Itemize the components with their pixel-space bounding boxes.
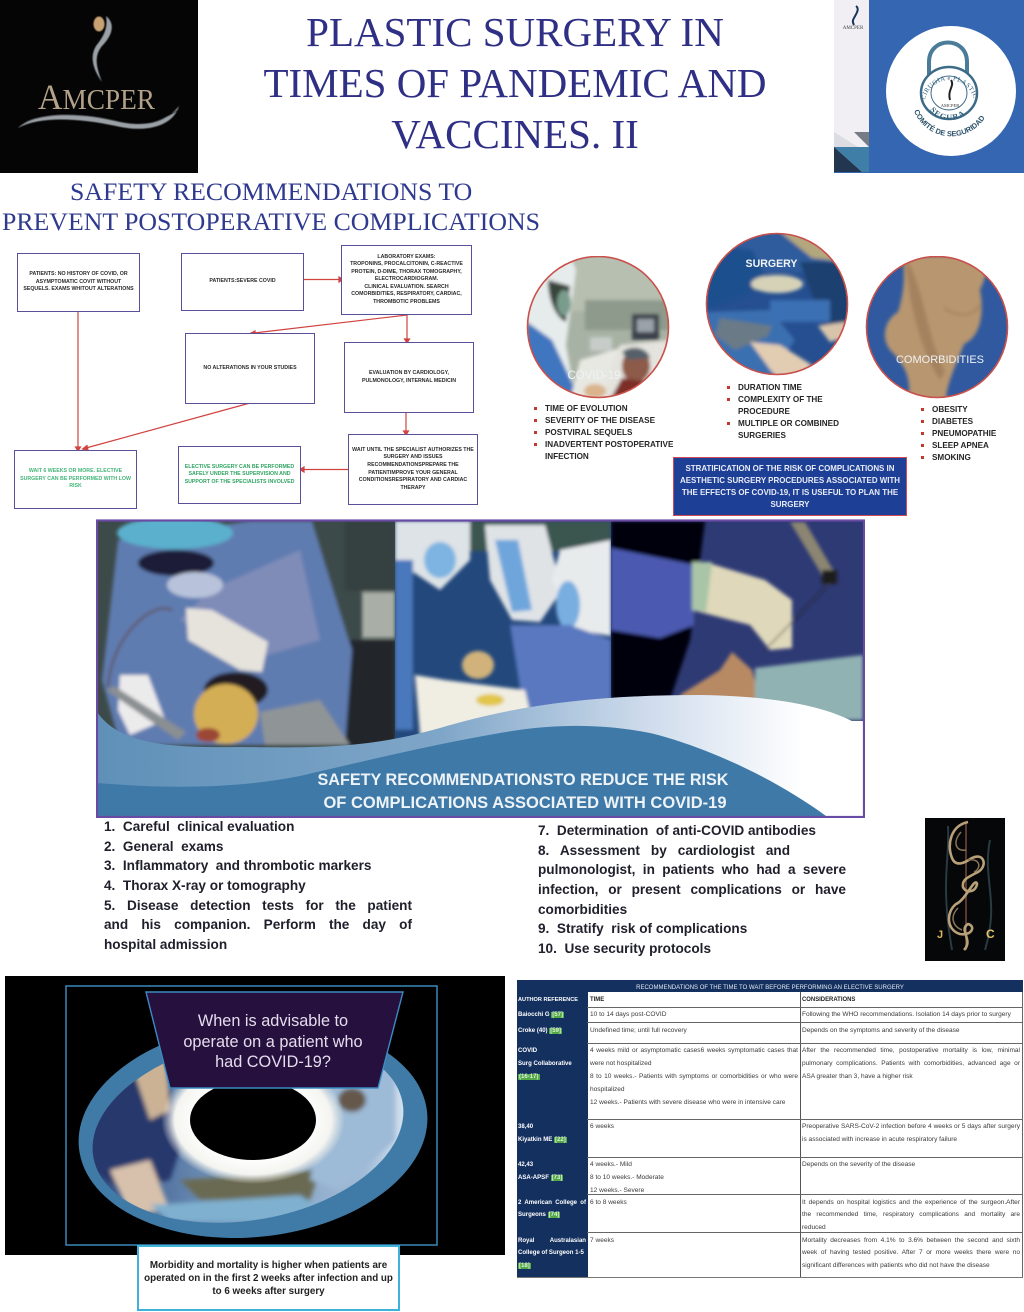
callout: risk stratification: THE EFFECTS OF COVID-19, IT IS USEFUL TO PLAN THE [682, 488, 898, 497]
box: no history: SEQUELS. EXAMS WHITOUT ALTERATIONS [23, 286, 134, 292]
box: no history [17, 253, 140, 312]
table: recommended wait times: the recommended time, respiratory complications and mortality are [802, 1211, 1020, 1218]
callout: risk stratification: SURGERY [771, 500, 809, 509]
table: recommended wait times: After the recommended time, postoperative mortality is low, minimal [802, 1046, 1020, 1054]
icon: caduceus JC: J [937, 929, 943, 941]
callout: risk stratification: AESTHETIC SURGERY PROCEDURES ASSOCIATED WITH [680, 476, 900, 485]
table: recommended wait times: 12 weeks.- Patients with severe disease who were in intensive care [590, 1098, 785, 1106]
list: comorbidities: PNEUMOPATHIE [932, 428, 996, 438]
list: COVID-19 factors: SEVERITY OF THE DISEASE [545, 416, 655, 424]
table: recommended wait times: week of having tested positive. After 7 or more weeks there were no [802, 1249, 1020, 1256]
box: wait for specialist: RECOMMENDATIONSPREPARE THE [367, 462, 459, 468]
box: wait 6 weeks: RISK [69, 483, 82, 489]
question banner: operate on a patient who [183, 1033, 363, 1051]
table: recommended wait times: hospitalized [590, 1086, 625, 1092]
box: laboratory exams: COMORBIDITIES, RESPIRATORY, CARDIAC, [351, 291, 462, 297]
list: recommendations 7 to 10: pulmonologist, in patients who had a severe [538, 862, 846, 877]
arrows [74, 276, 410, 474]
table: recommended wait times: Croke (40) [59] [518, 1028, 561, 1034]
icon: caduceus JC [925, 818, 1005, 961]
panel: when to operate [5, 976, 505, 1255]
circle: COVID-19 [526, 256, 670, 398]
table: recommended wait times: It depends on hospital logistics and the experience of the surgeon.After [802, 1198, 1020, 1206]
box: no history: PATIENTS: NO HISTORY OF COVID, OR [29, 271, 128, 277]
list: recommendations 1 to 5: 3. Inflammatory and thrombotic markers [104, 858, 371, 873]
table: recommended wait times: 2 American College of [518, 1200, 586, 1206]
logo: AMCPER: AMCPER [38, 77, 156, 117]
box: wait 6 weeks: SURGERY CAN BE PERFORMED WITH LOW [20, 476, 131, 482]
list: recommendations 7 to 10 [538, 823, 846, 956]
box: specialist evaluation [344, 342, 474, 413]
box: no alterations: NO ALTERATIONS IN YOUR STUDIES [203, 365, 297, 371]
list: comorbidities: SLEEP APNEA [932, 440, 989, 450]
table: recommended wait times: CONSIDERATIONS [802, 996, 855, 1002]
callout: risk stratification: STRATIFICATION OF THE RISK OF COMPLICATIONS IN [685, 464, 894, 473]
subtitle: SAFETY RECOMMENDATIONS TO [70, 177, 472, 206]
list: recommendations 7 to 10: 9. Stratify risk of complications [538, 921, 747, 936]
photo: child procedure [97, 517, 395, 761]
box: no alterations [185, 333, 315, 404]
table: recommended wait times: College of Surgeon 1-5 [518, 1250, 584, 1256]
table: recommended wait times: pulmonary complications. Patients with comorbidities, advanced age or [802, 1060, 1020, 1066]
box: laboratory exams: CLINICAL EVALUATION. SEARCH [364, 284, 449, 290]
list: surgery factors: SURGERIES [738, 430, 786, 440]
list: recommendations 1 to 5: and his companion. Perform the day of [104, 917, 412, 932]
list: surgery factors: DURATION TIME [738, 382, 802, 392]
logo: safety committee padlock: AMCPER [941, 103, 959, 108]
list: recommendations 1 to 5: 5. Disease detection tests for the patient [104, 898, 412, 913]
callout: risk stratification [673, 457, 907, 516]
list: recommendations 1 to 5 [104, 819, 412, 952]
list: COVID-19 factors: INADVERTENT POSTOPERATIVE [545, 440, 673, 448]
banner: safety recommendations: OF COMPLICATIONS ASSOCIATED WITH COVID-19 [323, 794, 727, 812]
box: specialist evaluation: PULMONOLOGY, INTERNAL MEDICIN [362, 378, 456, 384]
box: laboratory exams: TROPONINS, PROCALCITONIN, C-REACTIVE [350, 261, 463, 267]
list: COVID-19 factors: POSTVIRAL SEQUELS [545, 428, 632, 436]
list: recommendations 1 to 5: 1. Careful clinical evaluation [104, 819, 294, 834]
list: recommendations 7 to 10: 8. Assessment by cardiologist and [538, 843, 790, 858]
box: wait for specialist: PATIENTIMPROVE YOUR GENERAL [368, 470, 458, 476]
table: recommended wait times: Following the WHO recommendations. Isolation 14 days prior to surgery [802, 1010, 1011, 1018]
list: comorbidities: SMOKING [932, 452, 971, 462]
table: recommended wait times: AUTHOR REFERENCE [518, 996, 578, 1002]
logo: safety committee padlock: AMCPER [843, 26, 864, 31]
lamp centre [190, 1080, 316, 1160]
list: recommendations 7 to 10: infection, or present complications or have [538, 882, 846, 897]
operating theatre photo [92, 1064, 404, 1223]
table: recommended wait times: Preoperative SARS-CoV-2 infection before 4 weeks or 5 days after surgery [802, 1122, 1020, 1130]
callout: morbidity and mortality: operated on in the first 2 weeks after infection and up [144, 1273, 393, 1284]
table: recommended wait times: Surgeons [74] [518, 1212, 559, 1218]
table: recommended wait times: Undefined time; until full recovery [590, 1026, 687, 1034]
subtitle: PREVENT POSTOPERATIVE COMPLICATIONS [2, 207, 540, 236]
list: surgery factors: MULTIPLE OR COMBINED [738, 418, 839, 428]
box: wait for specialist: CONDITIONSRESPIRATORY AND CARDIAC [359, 477, 467, 483]
box: elective surgery under supervision: SAFELY UNDER THE SUPERVISION AND [188, 471, 291, 477]
list: recommendations 1 to 5: 4. Thorax X-ray or tomography [104, 878, 306, 893]
list: surgery factors [727, 382, 839, 440]
callout: morbidity and mortality [137, 1245, 400, 1311]
box: laboratory exams: THROMBOTIC PROBLEMS [373, 299, 440, 305]
box: elective surgery under supervision: SUPPORT OF THE SPECIALISTS INVOLVED [185, 479, 294, 485]
callout: morbidity and mortality: Morbidity and mortality is higher when patients are [150, 1260, 387, 1270]
photo: surgical team [395, 521, 611, 761]
table: recommended wait times: 42,43 [518, 1162, 533, 1168]
table: recommended wait times: [18] [519, 1262, 530, 1268]
box: specialist evaluation: EVALUATION BY CARDIOLOGY, [369, 370, 449, 376]
title: VACCINES. II [391, 111, 639, 157]
box: wait 6 weeks [14, 450, 137, 509]
box: no history: ASYMPTOMATIC COVIT WITHOUT [36, 279, 121, 285]
box: laboratory exams [341, 245, 472, 315]
box: wait 6 weeks: WAIT 6 WEEKS OR MORE. ELECTIVE [29, 468, 122, 474]
table: recommended wait times [517, 980, 1023, 1278]
circle: COVID-19: COVID-19 [567, 370, 621, 382]
banner: safety recommendations: SAFETY RECOMMENDATIONSTO REDUCE THE RISK [317, 771, 729, 789]
callout: morbidity and mortality: to 6 weeks after surgery [212, 1286, 325, 1297]
wave: dark [97, 726, 826, 817]
table: recommended wait times: Depends on the severity of the disease [802, 1161, 915, 1168]
box: wait for specialist: SURGERY AND ISSUES [383, 454, 442, 460]
logo: safety committee padlock: SEGURA [930, 107, 964, 120]
circle: comorbidities [866, 256, 1008, 398]
box: wait for specialist: THERAPY [400, 485, 426, 491]
list: COVID-19 factors: INFECTION [545, 452, 589, 460]
list: surgery factors: COMPLEXITY OF THE [738, 394, 823, 404]
box: severe covid: PATIENTS:SEVERE COVID [209, 278, 276, 284]
list: recommendations 1 to 5: hospital admission [104, 937, 227, 952]
table: recommended wait times: Mortality decreases from 4.1% to 3.6% between the second and sixth [802, 1236, 1020, 1244]
logo: AMCPER [0, 0, 198, 173]
list: comorbidities: DIABETES [932, 416, 973, 426]
table: recommended wait times: Kiyatkin ME [22] [518, 1136, 566, 1142]
table: recommended wait times: RECOMMENDATIONS OF THE TIME TO WAIT BEFORE PERFORMING AN ELECTIVE SURGERY [636, 984, 904, 990]
list: comorbidities: OBESITY [932, 404, 968, 414]
table: recommended wait times: 4 weeks mild or asymptomatic cases6 weeks symptomatic cases that [590, 1046, 798, 1054]
flowchart: patient pathways [14, 245, 478, 509]
circle: surgery [706, 232, 848, 376]
box: elective surgery under supervision: ELECTIVE SURGERY CAN BE PERFORMED [185, 464, 294, 470]
table: recommended wait times: Depends on the symptoms and severity of the disease [802, 1026, 960, 1034]
table: recommended wait times: ASA greater than 3, have a higher risk [802, 1072, 913, 1080]
ring [68, 1005, 438, 1255]
box: elective surgery under supervision [178, 446, 301, 504]
table: recommended wait times: 7 weeks [590, 1236, 614, 1244]
table: recommended wait times: 6 to 8 weeks [590, 1198, 627, 1206]
box: severe covid [181, 253, 304, 311]
wave: light [97, 695, 864, 817]
table: recommended wait times: is associated with increase in acute respiratory failure [802, 1136, 957, 1142]
question banner: had COVID-19? [215, 1053, 331, 1071]
table: recommended wait times: 10 to 14 days post-COVID [590, 1010, 666, 1018]
table: recommended wait times: 4 weeks.- Mild [590, 1161, 632, 1168]
table: recommended wait times: Baiocchi G [57] [518, 1012, 563, 1018]
box: laboratory exams: ELECTROCARDIOGRAM. [375, 276, 438, 282]
table: recommended wait times: 8 to 10 weeks.- Moderate [590, 1174, 664, 1180]
list: recommendations 1 to 5: 2. General exams [104, 839, 223, 854]
list: COVID-19 factors: TIME OF EVOLUTION [545, 404, 628, 412]
table: recommended wait times: COVID [518, 1048, 537, 1054]
list: recommendations 7 to 10: comorbidities [538, 902, 627, 917]
list: recommendations 7 to 10: 7. Determination of anti-COVID antibodies [538, 823, 816, 838]
table: recommended wait times: Surg Collaborative [518, 1060, 572, 1066]
photo: rhinoplasty [611, 521, 863, 721]
table: recommended wait times: Royal Australasian [518, 1238, 586, 1244]
box: laboratory exams: LABORATORY EXAMS: [377, 254, 436, 260]
box: wait for specialist: WAIT UNTIL THE SPECIALIST AUTHORIZES THE [352, 447, 474, 453]
logo: safety committee padlock [834, 0, 1024, 173]
table: recommended wait times: ASA-APSF [73] [518, 1174, 562, 1180]
circle: surgery: SURGERY [746, 258, 798, 270]
table: recommended wait times: reduced [802, 1224, 826, 1231]
table: recommended wait times: 6 weeks [590, 1122, 614, 1130]
table: recommended wait times: 8 to 10 weeks.- Patients with symptoms or comorbidities or who were [590, 1072, 798, 1080]
box: laboratory exams: PROTEIN, D-DIME, THORAX TOMOGRAPHY, [351, 269, 462, 275]
title: TIMES OF PANDEMIC AND [263, 60, 767, 106]
circle: comorbidities: COMORBIDITIES [896, 354, 984, 366]
banner: safety recommendations [96, 519, 865, 818]
subtitle [2, 177, 540, 236]
list: COVID-19 factors [534, 404, 674, 460]
table: recommended wait times: 12 weeks.- Severe [590, 1186, 644, 1194]
title: PLASTIC SURGERY IN [306, 9, 724, 55]
list: surgery factors: PROCEDURE [738, 406, 790, 416]
logo: safety committee padlock: COMITÉ DE SEGURIDAD [914, 110, 984, 136]
list: comorbidities [921, 404, 996, 462]
table: recommended wait times: TIME [590, 996, 604, 1002]
table: recommended wait times: 38,40 [518, 1124, 533, 1130]
title [263, 9, 767, 157]
icon: caduceus JC: C [986, 927, 995, 941]
table: recommended wait times: significant differences with patients who did not have the disease [802, 1262, 990, 1268]
question banner [146, 992, 403, 1088]
table: recommended wait times: (16-17) [519, 1074, 538, 1080]
box: wait for specialist [348, 434, 478, 505]
list: recommendations 7 to 10: 10. Use security protocols [538, 941, 711, 956]
table: recommended wait times: were not hospitalized [590, 1060, 652, 1066]
question banner: When is advisable to [198, 1012, 348, 1030]
